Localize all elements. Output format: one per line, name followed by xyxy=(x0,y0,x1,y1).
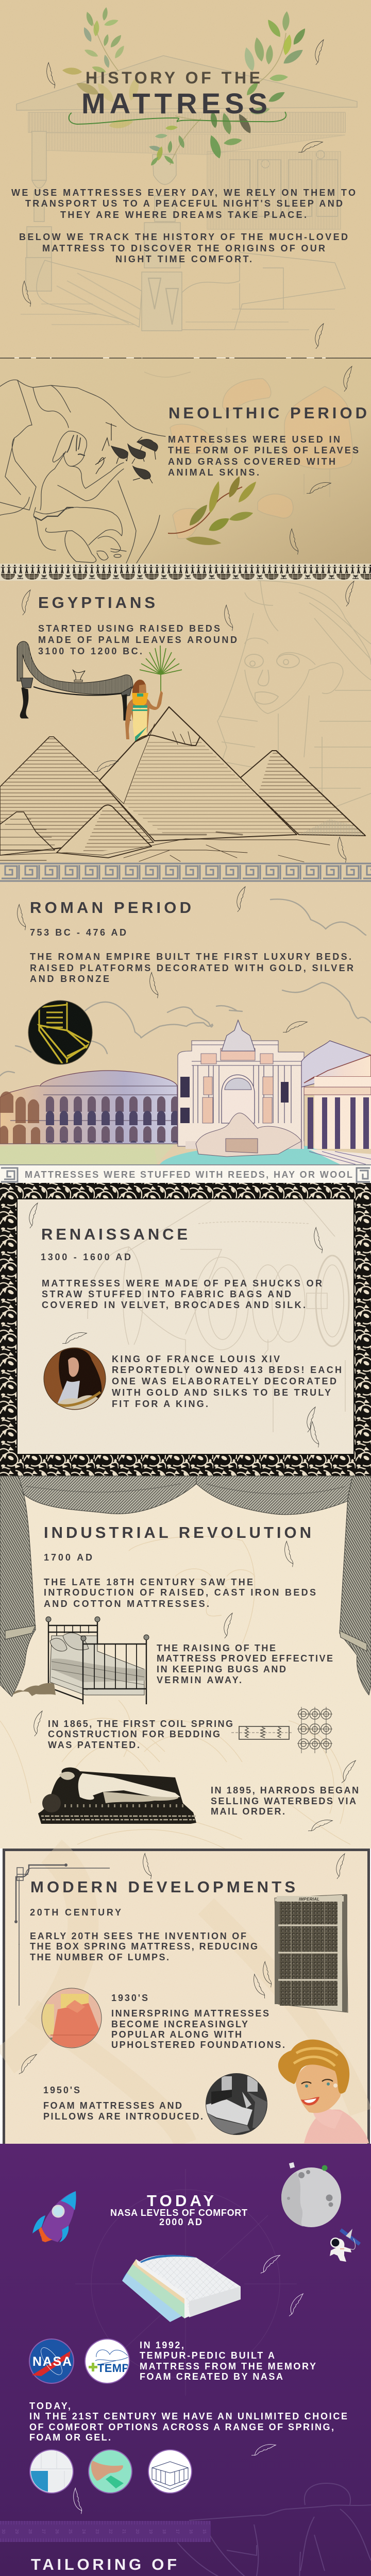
decorative ruler: 22 xyxy=(108,2529,113,2534)
illustration: iron bed xyxy=(46,1617,149,1704)
illustration: memory foam mattress cutaway xyxy=(122,2255,241,2322)
decorative ruler: 16 xyxy=(189,2529,193,2534)
illustration: caveman painting rock xyxy=(0,380,165,563)
decorative ruler: 25 xyxy=(68,2529,73,2534)
heading and text: modern developments: 20TH CENTURY xyxy=(30,1907,121,1918)
heading and text: roman period xyxy=(30,899,353,984)
heading and text: renaissance: COVERED IN VELVET, BROCADES AND SILK. xyxy=(42,1300,306,1310)
decorative ruler: 19 xyxy=(148,2529,153,2534)
heading: today: 2000 AD xyxy=(159,2217,202,2227)
illustration: faint pharaoh face xyxy=(217,581,371,835)
heading and text: renaissance xyxy=(41,1225,322,1310)
text: coil spring: CONSTRUCTION FOR BEDDING xyxy=(48,1729,220,1739)
text: harrods waterbeds: IN 1895, HARRODS BEGAN xyxy=(211,1785,359,1795)
decorative ruler: 21 xyxy=(122,2529,126,2534)
decorative band: greek key xyxy=(0,862,371,882)
text: today choice: OF COMFORT OPTIONS ACROSS A RANGE OF SPRING, xyxy=(29,2422,334,2432)
heading: today xyxy=(110,2192,247,2227)
heading and text: modern developments xyxy=(30,1878,295,1962)
heading and text: neolithic: AND GRASS COVERED WITH xyxy=(168,456,335,467)
illustration: faint canopy bed sketch xyxy=(16,56,357,331)
heading and text: egyptians: EGYPTIANS xyxy=(38,594,155,612)
heading: today: NASA LEVELS OF COMFORT xyxy=(110,2208,247,2218)
panel: floral border frame xyxy=(0,1183,371,1476)
heading and text: roman period: AND BRONZE xyxy=(30,974,109,984)
icon: olive leaf branch xyxy=(168,474,259,547)
heading and text: roman period: 753 BC - 476 AD xyxy=(30,927,126,938)
illustration: imperial spring mattress xyxy=(275,1894,348,2012)
heading and text: industrial revolution: INDUSTRIAL REVOLUTION xyxy=(44,1523,311,1541)
heading and text: egyptians: STARTED USING RAISED BEDS xyxy=(38,623,220,634)
decorative ruler: 26 xyxy=(55,2529,59,2534)
decorative ruler: 17 xyxy=(175,2529,180,2534)
decorative ruler: 20 xyxy=(135,2529,140,2534)
icon: portrait of louis xiv xyxy=(44,1348,106,1412)
illustration: egyptian bed xyxy=(17,641,133,720)
text: louis xiv beds xyxy=(112,1354,342,1409)
heading and text: egyptians xyxy=(38,594,237,656)
heading and text: modern developments: THE NUMBER OF LUMPS. xyxy=(30,1952,169,1962)
decorative feathers xyxy=(12,40,356,2077)
text: coil spring: WAS PATENTED. xyxy=(48,1740,140,1750)
icon: rat xyxy=(12,1683,56,1696)
text: tempur-pedic 1992 xyxy=(140,2340,316,2382)
heading and text: neolithic: ANIMAL SKINS. xyxy=(168,467,259,478)
decorative ruler: 24 xyxy=(81,2529,86,2534)
text: 1930s xyxy=(111,1993,285,2050)
decorative white feathers xyxy=(68,2251,303,2514)
text: 1950s: FOAM MATTRESSES AND xyxy=(43,2100,182,2111)
icon: gel mattress diagram xyxy=(148,2450,192,2493)
illustration: faint back pain figure xyxy=(177,2483,371,2576)
illustration: roman skyline xyxy=(0,1020,371,1164)
text: tempur-pedic 1992: IN 1992, xyxy=(140,2340,184,2350)
divider xyxy=(0,358,371,359)
heading and text: renaissance: STRAW STUFFED INTO FABRIC BAGS AND xyxy=(42,1289,291,1299)
icon: 1930s orange bed photo xyxy=(41,1988,102,2050)
heading and text: neolithic xyxy=(168,404,367,478)
illustration: pyramids of giza xyxy=(0,707,365,862)
decorative ruler: 18 xyxy=(162,2529,166,2534)
intro text: THEY ARE WHERE DREAMS TAKE PLACE. xyxy=(60,210,307,220)
text: tempur-pedic 1992: MATTRESS FROM THE MEMORY xyxy=(140,2361,316,2371)
text: harrods waterbeds: MAIL ORDER. xyxy=(211,1806,285,1817)
text: raising the mattress: VERMIN AWAY. xyxy=(157,1675,242,1685)
text: tempur-pedic 1992: FOAM CREATED BY NASA xyxy=(140,2371,283,2382)
decorative ruler: 30 xyxy=(1,2529,6,2534)
icon: nasa logo: NASA xyxy=(32,2354,72,2369)
decorative ruler: 27 xyxy=(41,2529,46,2534)
text: tempur-pedic 1992: TEMPUR-PEDIC BUILT A xyxy=(140,2350,275,2361)
heading: tailoring of mattresses: TAILORING OF xyxy=(31,2555,177,2573)
panel: neolithic background xyxy=(0,358,371,564)
illustration: faint da vinci sketch xyxy=(88,1195,349,1432)
panel: modern developments frame xyxy=(4,1850,369,2145)
illustration: cave paintings of deer xyxy=(95,422,158,483)
heading and text: renaissance: 1300 - 1600 AD xyxy=(41,1252,131,1262)
heading and text: industrial revolution: INTRODUCTION OF RAISED, CAST IRON BEDS xyxy=(44,1587,316,1598)
decorative frieze xyxy=(0,564,371,581)
icon: gold roman bed xyxy=(28,1001,92,1072)
heading and text: roman period: ROMAN PERIOD xyxy=(30,899,191,917)
panel: industrial revolution background xyxy=(0,1476,371,1849)
intro text: BELOW WE TRACK THE HISTORY OF THE MUCH-LOVED xyxy=(19,232,348,242)
intro text: NIGHT TIME COMFORT. xyxy=(115,254,252,264)
heading and text: renaissance: MATTRESSES WERE MADE OF PEA SHUCKS OR xyxy=(42,1278,322,1289)
illustration: faint cave bison xyxy=(144,372,352,539)
text: raising the mattress xyxy=(157,1643,333,1685)
icon: moon xyxy=(281,2162,341,2227)
illustration: egyptian woman with palm xyxy=(125,646,182,742)
illustration: imperial spring mattress: IMPERIAL xyxy=(299,1897,319,1902)
text: louis xiv beds: FIT FOR A KING. xyxy=(112,1399,208,1409)
illustration: theatre curtains xyxy=(0,1476,371,1697)
decorative ruler xyxy=(0,2521,211,2542)
text: today choice: IN THE 21ST CENTURY WE HAVE AN UNLIMITED CHOICE xyxy=(29,2411,347,2421)
heading and text: neolithic: MATTRESSES WERE USED IN xyxy=(168,434,340,445)
intro text xyxy=(11,188,356,264)
heading and text: roman period: RAISED PLATFORMS DECORATED WITH GOLD, SILVER xyxy=(30,963,353,973)
text: 1930s: POPULAR ALONG WITH xyxy=(111,2029,242,2040)
intro text: TRANSPORT US TO A PEACEFUL NIGHT'S SLEEP AND xyxy=(25,198,343,209)
decorative ruler: 23 xyxy=(95,2529,99,2534)
ornament: art deco corner xyxy=(14,1864,110,2006)
callout band: mattress stuffing xyxy=(0,1164,371,1183)
illustration: smiling 1950s woman xyxy=(278,2040,369,2143)
text: 1950s: PILLOWS ARE INTRODUCED. xyxy=(43,2111,203,2122)
title: MATTRESS xyxy=(81,87,267,120)
text: louis xiv beds: ONE WAS ELABORATELY DECORATED xyxy=(112,1376,336,1386)
illustration: faint portrait and fingerprint xyxy=(0,1536,350,1850)
text: 1930s: 1930'S xyxy=(111,1993,148,2003)
panel: egyptians background xyxy=(0,581,371,862)
icon: tempur logo: TEMP xyxy=(97,2362,129,2375)
text: 1950s xyxy=(43,2085,203,2122)
text: harrods waterbeds: SELLING WATERBEDS VIA xyxy=(211,1796,356,1806)
illustration: coil spring patent xyxy=(231,1707,332,1753)
illustration: faint target lines xyxy=(75,2169,297,2396)
text: coil spring: IN 1865, THE FIRST COIL SPRING xyxy=(48,1719,233,1729)
heading and text: roman period: THE ROMAN EMPIRE BUILT THE FIRST LUXURY BEDS. xyxy=(30,952,351,962)
heading and text: modern developments: EARLY 20TH SEES THE INVENTION OF xyxy=(30,1931,246,1941)
title flourish xyxy=(69,112,286,124)
heading and text: industrial revolution xyxy=(44,1523,316,1609)
panel: roman background xyxy=(0,882,371,1164)
text: 1950s: 1950'S xyxy=(43,2085,80,2095)
decorative ruler: 28 xyxy=(28,2529,32,2534)
text: louis xiv beds: REPORTEDLY OWNED 413 BEDS! EACH xyxy=(112,1365,342,1375)
intro text: MATTRESS TO DISCOVER THE ORIGINS OF OUR xyxy=(42,243,325,253)
icon: astronaut with satellite xyxy=(330,2229,360,2262)
heading and text: industrial revolution: AND COTTON MATTRESSES. xyxy=(44,1599,209,1609)
panel: intro background xyxy=(0,0,371,358)
text: raising the mattress: MATTRESS PROVED EFFECTIVE xyxy=(157,1653,333,1664)
title xyxy=(81,69,267,120)
text: 1930s: BECOME INCREASINGLY xyxy=(111,2019,248,2029)
title: HISTORY OF THE xyxy=(86,69,260,87)
text: raising the mattress: THE RAISING OF THE xyxy=(157,1643,276,1653)
icon: memory foam hand xyxy=(89,2450,132,2493)
text: louis xiv beds: KING OF FRANCE LOUIS XIV xyxy=(112,1354,280,1364)
heading and text: neolithic: NEOLITHIC PERIOD xyxy=(168,404,367,422)
text: today choice xyxy=(29,2401,347,2443)
heading and text: egyptians: MADE OF PALM LEAVES AROUND xyxy=(38,635,237,645)
text: coil spring xyxy=(48,1719,233,1750)
heading and text: modern developments: MODERN DEVELOPMENTS xyxy=(30,1878,295,1896)
callout band: mattress stuffing: MATTRESSES WERE STUFFED WITH REEDS, HAY OR WOOL xyxy=(25,1170,352,1180)
text: 1930s: INNERSPRING MATTRESSES xyxy=(111,2008,269,2019)
text: harrods waterbeds xyxy=(211,1785,359,1817)
panel: today background xyxy=(0,2144,371,2576)
icon: 1950s foam mattress photo xyxy=(206,2073,267,2136)
text: 1930s: UPHOLSTERED FOUNDATIONS. xyxy=(111,2040,285,2050)
icon: rocket xyxy=(32,2191,76,2242)
decorative ruler: 15 xyxy=(202,2529,207,2534)
heading and text: modern developments: THE BOX SPRING MATTRESS, REDUCING xyxy=(30,1941,258,1952)
heading and text: industrial revolution: 1700 AD xyxy=(44,1552,92,1563)
heading and text: industrial revolution: THE LATE 18TH CENTURY SAW THE xyxy=(44,1577,253,1587)
heading and text: renaissance: RENAISSANCE xyxy=(41,1225,188,1243)
panel: renaissance background xyxy=(17,1199,354,1454)
heading: today: TODAY xyxy=(147,2192,214,2210)
text: louis xiv beds: WITH GOLD AND SILKS TO BE TRULY xyxy=(112,1387,331,1398)
heading and text: egyptians: 3100 TO 1200 BC. xyxy=(38,646,142,656)
intro text: WE USE MATTRESSES EVERY DAY, WE RELY ON THEM TO xyxy=(11,188,356,198)
icon: spring mattress xyxy=(30,2450,73,2493)
text: today choice: TODAY, xyxy=(29,2401,71,2411)
decorative ruler: 29 xyxy=(14,2529,19,2534)
icon: nasa logo xyxy=(29,2339,74,2383)
illustration: clouds xyxy=(0,899,371,1076)
illustration: waterbed woodcut xyxy=(38,1768,196,1824)
text: today choice: FOAM OR GEL. xyxy=(29,2432,111,2443)
heading and text: neolithic: THE FORM OF PILES OF LEAVES xyxy=(168,445,359,455)
icon: tempur logo xyxy=(85,2339,129,2383)
text: raising the mattress: IN KEEPING BUGS AND xyxy=(157,1664,286,1674)
illustration: watercolour leaves wreath xyxy=(62,7,308,167)
